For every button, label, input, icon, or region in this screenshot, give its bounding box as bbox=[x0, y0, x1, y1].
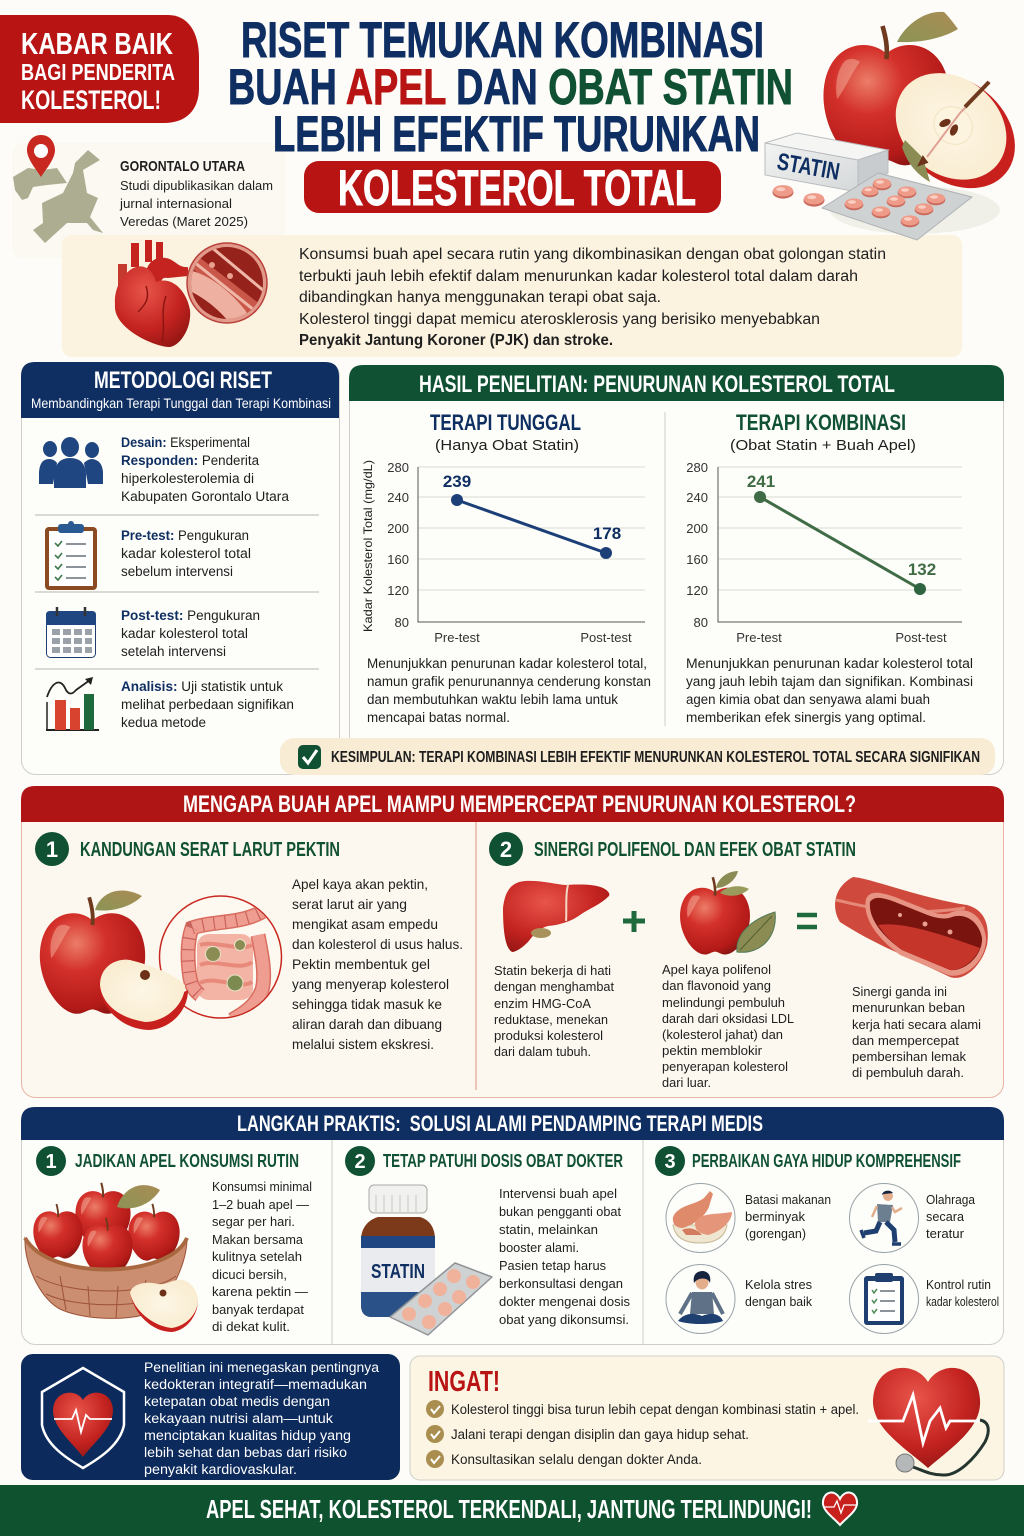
text: desain: Kabupaten Gorontalo Utara bbox=[121, 489, 289, 504]
text: sinergi ganda bbox=[852, 985, 981, 1080]
intro panel: Kolesterol tinggi dapat memicu aterosklerosis yang berisiko menyebabkan bbox=[299, 311, 820, 328]
text: sinergi ganda: di pembuluh darah. bbox=[852, 1066, 964, 1080]
text: step 2: Pasien tetap harus bbox=[499, 1258, 606, 1273]
text: pektin: melalui sistem ekskresi. bbox=[292, 1036, 434, 1052]
text: olahraga: teratur bbox=[926, 1227, 964, 1241]
text: step 1: Konsumsi minimal bbox=[212, 1179, 312, 1194]
text: hasil terapi tunggal: mencapai batas normal. bbox=[367, 710, 510, 725]
heading: metodologi: Membandingkan Terapi Tunggal dan Terapi Kombinasi bbox=[31, 395, 331, 411]
text: batasi makanan bbox=[745, 1193, 831, 1241]
text: step 2: booster alami. bbox=[499, 1240, 579, 1255]
heading: terapi kombinasi: (Obat Statin + Buah Apel) bbox=[730, 437, 916, 454]
text: kelola stres: dengan baik bbox=[745, 1295, 813, 1309]
map pin bbox=[27, 135, 55, 177]
illustration: statin bottle and blister bbox=[361, 1185, 492, 1335]
text: statin: produksi kolesterol bbox=[494, 1029, 603, 1043]
text: pektin: mengikat asam empedu bbox=[292, 916, 438, 932]
text: hasil terapi kombinasi: agen kimia obat dan senyawa alami buah bbox=[686, 692, 930, 707]
icon: batasi makanan bbox=[666, 1184, 735, 1252]
text: post-test: setelah intervensi bbox=[121, 644, 226, 659]
text: hasil terapi kombinasi: yang jauh lebih tajam dan signifikan. Kombinasi bbox=[686, 674, 973, 689]
line chart: terapi tunggal: 200 bbox=[387, 521, 409, 536]
text: kedokteran integratif: kekayaan nutrisi alam—untuk bbox=[144, 1411, 333, 1426]
line chart: terapi tunggal bbox=[361, 460, 645, 645]
location card: Gorontalo Utara: Veredas (Maret 2025) bbox=[120, 214, 248, 229]
text: analisis: melihat perbedaan signifikan bbox=[121, 697, 294, 712]
text: pektin: Pektin membentuk gel bbox=[292, 956, 430, 972]
text: step 1: 1–2 buah apel — bbox=[212, 1197, 309, 1212]
icon: plus bbox=[623, 911, 645, 932]
text: hasil terapi tunggal: Menunjukkan penurunan kadar kolesterol total, bbox=[367, 656, 647, 671]
icon: kontrol rutin bbox=[850, 1264, 918, 1334]
line chart: terapi tunggal: 160 bbox=[387, 552, 409, 567]
text: sinergi ganda: Sinergi ganda ini bbox=[852, 985, 947, 999]
line chart: terapi kombinasi bbox=[686, 460, 962, 645]
line chart: terapi tunggal: 178 bbox=[593, 524, 621, 543]
heading: langkah praktis bbox=[21, 1107, 1004, 1140]
line chart: terapi tunggal: Pre-test bbox=[434, 630, 480, 645]
text: kedokteran integratif: menciptakan kualitas hidup yang bbox=[144, 1428, 351, 1443]
text: step 2: obat yang dikonsumsi. bbox=[499, 1312, 629, 1327]
text: sinergi ganda: pembersihan lemak bbox=[852, 1050, 967, 1064]
subheading: pektin bbox=[35, 832, 340, 866]
line chart: terapi tunggal: 120 bbox=[387, 583, 409, 598]
text: polifenol: melindungi pembuluh bbox=[662, 996, 785, 1010]
panel: langkah praktis bbox=[21, 1107, 1004, 1344]
panel: ingat bbox=[410, 1356, 1004, 1480]
heading: hasil penelitian bbox=[349, 365, 1004, 401]
heading: terapi kombinasi: TERAPI KOMBINASI bbox=[736, 410, 906, 435]
text: sinergi ganda: kerja hati secara alami bbox=[852, 1018, 981, 1032]
text: desain: Desain: Eksperimental bbox=[121, 435, 250, 450]
line chart: terapi kombinasi: 240 bbox=[686, 490, 708, 505]
text: batasi makanan: berminyak bbox=[745, 1210, 806, 1224]
text: kedokteran integratif: Penelitian ini menegaskan pentingnya bbox=[144, 1360, 379, 1375]
line chart: terapi kombinasi: 80 bbox=[694, 615, 708, 630]
panel: mengapa buah apel bbox=[21, 786, 1004, 1098]
line chart: terapi kombinasi: Post-test bbox=[895, 630, 947, 645]
text: hasil terapi tunggal: namun grafik penurunannya cenderung konstan bbox=[367, 674, 651, 689]
title: KOLESTEROL TOTAL bbox=[338, 160, 696, 216]
step 2 heading bbox=[345, 1146, 623, 1176]
text: hasil terapi tunggal bbox=[367, 656, 651, 725]
map of Gorontalo Utara bbox=[13, 150, 103, 243]
badge: kabar baik: BAGI PENDERITA bbox=[21, 59, 175, 85]
text: step 2: statin, melainkan bbox=[499, 1222, 598, 1237]
icon: heart with stethoscope bbox=[868, 1368, 988, 1475]
step 3 heading bbox=[655, 1146, 961, 1176]
text: kedokteran integratif: ketepatan obat medis dengan bbox=[144, 1394, 330, 1409]
text: statin: reduktase, menekan bbox=[494, 1013, 608, 1027]
text: step 1: di dekat kulit. bbox=[212, 1319, 290, 1334]
text: kelola stres: Kelola stres bbox=[745, 1278, 812, 1292]
text: pektin bbox=[292, 876, 463, 1052]
icon: footer heart bbox=[823, 1493, 857, 1525]
step 3 heading: 3 bbox=[664, 1151, 676, 1173]
heading: metodologi bbox=[21, 362, 339, 418]
step 2 heading: TETAP PATUHI DOSIS OBAT DOKTER bbox=[383, 1151, 623, 1171]
heading: terapi tunggal: TERAPI TUNGGAL bbox=[430, 410, 581, 435]
text: step 1: karena pektin — bbox=[212, 1284, 308, 1299]
line chart: terapi kombinasi: 200 bbox=[686, 521, 708, 536]
line chart: terapi kombinasi: Pre-test bbox=[736, 630, 782, 645]
heading: terapi tunggal bbox=[430, 410, 581, 454]
line chart: terapi tunggal: 80 bbox=[395, 615, 409, 630]
text: step 2 bbox=[499, 1186, 630, 1327]
text: kontrol rutin: Kontrol rutin bbox=[926, 1278, 991, 1292]
text: batasi makanan: (gorengan) bbox=[745, 1227, 806, 1241]
panel: kedokteran integratif bbox=[21, 1354, 400, 1480]
line chart: terapi tunggal: 280 bbox=[387, 460, 409, 475]
location card: Gorontalo Utara: jurnal internasional bbox=[119, 196, 232, 211]
panel: metodologi riset bbox=[21, 362, 340, 774]
text: analisis bbox=[121, 679, 294, 730]
text: pektin: Apel kaya akan pektin, bbox=[292, 876, 428, 892]
text: step 1: Makan bersama bbox=[212, 1232, 304, 1247]
text: pektin: yang menyerap kolesterol bbox=[292, 976, 449, 992]
line chart: terapi tunggal: Kadar Kolesterol Total (mg/dL) bbox=[361, 460, 375, 632]
line chart: terapi tunggal: 239 bbox=[443, 472, 471, 491]
badge: kabar baik: KOLESTEROL! bbox=[21, 85, 161, 115]
text: kelola stres bbox=[745, 1278, 813, 1309]
text: kedokteran integratif bbox=[144, 1360, 379, 1477]
text: step 1: segar per hari. bbox=[212, 1214, 295, 1229]
panel: hasil penelitian bbox=[280, 365, 1004, 775]
location card: Gorontalo Utara: Studi dipublikasikan dalam bbox=[120, 178, 273, 193]
text: pre-test: Pre-test: Pengukuran bbox=[121, 528, 249, 543]
text: kedokteran integratif: lebih sehat dan bebas dari risiko bbox=[144, 1445, 347, 1460]
text: post-test: kadar kolesterol total bbox=[121, 626, 248, 641]
text: pektin: serat larut air yang bbox=[292, 896, 407, 912]
text: olahraga bbox=[926, 1193, 975, 1241]
text: kedokteran integratif: penyakit kardiovaskular. bbox=[144, 1462, 297, 1477]
text: polifenol: pektin memblokir bbox=[662, 1044, 762, 1058]
text: analisis: kedua metode bbox=[121, 715, 206, 730]
checklist item 1: Kolesterol tinggi bisa turun lebih cepat dengan kombinasi statin + apel. bbox=[451, 1402, 859, 1417]
text: pektin: sehingga tidak masuk ke bbox=[292, 996, 442, 1012]
icon: apple with leaf bbox=[680, 871, 775, 955]
subheading: pektin: KANDUNGAN SERAT LARUT PEKTIN bbox=[80, 839, 340, 861]
text: polifenol bbox=[662, 963, 794, 1090]
line chart: terapi tunggal: Post-test bbox=[580, 630, 632, 645]
heading: mengapa bbox=[21, 786, 1004, 822]
footer banner bbox=[0, 1485, 1024, 1536]
text: step 1: banyak terdapat bbox=[212, 1302, 304, 1317]
step 1 heading: 1 bbox=[45, 1151, 57, 1173]
text: step 1 bbox=[212, 1179, 312, 1334]
badge: kabar baik bbox=[0, 15, 199, 123]
illustration: apples and statin: STATIN bbox=[775, 148, 842, 186]
title: LEBIH EFEKTIF TURUNKAN bbox=[273, 106, 760, 162]
step 2 heading: 2 bbox=[354, 1151, 366, 1173]
panel: ingat: INGAT! bbox=[428, 1366, 500, 1398]
line chart: terapi kombinasi: 160 bbox=[686, 552, 708, 567]
text: statin: Statin bekerja di hati bbox=[494, 964, 611, 978]
icon: olahraga bbox=[850, 1184, 918, 1252]
icon: shield with heart bbox=[42, 1368, 124, 1468]
text: polifenol: darah dari oksidasi LDL bbox=[662, 1012, 794, 1026]
text: desain bbox=[121, 435, 289, 504]
step 1 heading: JADIKAN APEL KONSUMSI RUTIN bbox=[75, 1151, 299, 1171]
step 1 heading bbox=[36, 1146, 299, 1176]
line chart: terapi tunggal: 240 bbox=[387, 490, 409, 505]
icon: clipboard bbox=[45, 521, 97, 590]
checklist item 3: Konsultasikan selalu dengan dokter Anda. bbox=[451, 1452, 702, 1467]
text: hasil terapi kombinasi: Menunjukkan penurunan kadar kolesterol total bbox=[686, 656, 973, 671]
intro panel bbox=[62, 235, 962, 357]
line chart: terapi kombinasi: 241 bbox=[747, 472, 775, 491]
text: pre-test: kadar kolesterol total bbox=[121, 546, 251, 561]
text: pektin: dan kolesterol di usus halus. bbox=[292, 936, 463, 952]
intro panel: dibandingkan hanya menggunakan terapi obat saja. bbox=[299, 289, 661, 306]
icon: equals bbox=[797, 915, 817, 927]
icon: artery bbox=[835, 877, 988, 978]
text: step 1: dicuci bersih, bbox=[212, 1267, 287, 1282]
text: statin: dengan menghambat bbox=[494, 980, 615, 994]
text: desain: hiperkolesterolemia di bbox=[121, 471, 254, 486]
text: kedokteran integratif: kedokteran integratif—memadukan bbox=[144, 1377, 367, 1392]
heading: terapi kombinasi bbox=[730, 410, 916, 454]
intro panel: Konsumsi buah apel secara rutin yang dikombinasikan dengan obat golongan statin bbox=[299, 246, 886, 263]
text: polifenol: Apel kaya polifenol bbox=[662, 963, 771, 977]
title: BUAH APEL DAN OBAT STATIN bbox=[228, 59, 793, 115]
illustration: apples and statin bbox=[765, 12, 1024, 240]
text: sinergi ganda: dan mempercepat bbox=[852, 1034, 960, 1048]
text: hasil terapi tunggal: dan membutuhkan waktu lebih lama untuk bbox=[367, 692, 618, 707]
illustration: statin bottle and blister: STATIN bbox=[371, 1261, 425, 1283]
text: post-test: Post-test: Pengukuran bbox=[121, 608, 260, 623]
intro panel: terbukti jauh lebih efektif dalam menurunkan kadar kolesterol total dalam darah bbox=[299, 268, 858, 285]
icon: calendar bbox=[46, 607, 96, 658]
text: pre-test: sebelum intervensi bbox=[121, 564, 233, 579]
text: hasil terapi kombinasi bbox=[686, 656, 973, 725]
subheading: sinergi bbox=[489, 832, 856, 866]
icon: kelola stres bbox=[666, 1264, 735, 1334]
icon: people bbox=[39, 437, 103, 488]
subheading: pektin: 1 bbox=[46, 837, 58, 862]
text: polifenol: (kolesterol jahat) dan bbox=[662, 1028, 783, 1042]
line chart: terapi kombinasi: 120 bbox=[686, 583, 708, 598]
heading: metodologi: METODOLOGI RISET bbox=[94, 367, 272, 394]
callout: kesimpulan bbox=[280, 738, 995, 775]
text: statin bbox=[494, 964, 615, 1059]
text: statin: dari dalam tubuh. bbox=[494, 1045, 591, 1059]
text: statin: enzim HMG-CoA bbox=[494, 997, 592, 1011]
icon: liver bbox=[503, 881, 609, 952]
text: hasil terapi kombinasi: memberikan efek sinergis yang optimal. bbox=[686, 710, 926, 725]
title bbox=[228, 12, 793, 216]
badge: kabar baik: KABAR BAIK bbox=[21, 26, 173, 61]
text: polifenol: dari luar. bbox=[662, 1076, 711, 1090]
text: pre-test bbox=[121, 528, 251, 579]
icon: heart with artery bbox=[115, 240, 270, 347]
location card: Gorontalo Utara bbox=[12, 135, 286, 258]
illustration: apple and intestine bbox=[40, 891, 282, 1030]
text: kontrol rutin bbox=[926, 1278, 999, 1309]
text: step 2: berkonsultasi dengan bbox=[499, 1276, 623, 1291]
text: sinergi ganda: menurunkan beban bbox=[852, 1001, 965, 1015]
text: kontrol rutin: kadar kolesterol bbox=[926, 1295, 999, 1309]
text: polifenol: penyerapan kolesterol bbox=[662, 1060, 788, 1074]
text: step 1: kulitnya setelah bbox=[212, 1249, 302, 1264]
subheading: sinergi: 2 bbox=[500, 837, 512, 862]
text: step 2: Intervensi buah apel bbox=[499, 1186, 617, 1201]
location card: Gorontalo Utara: GORONTALO UTARA bbox=[120, 158, 245, 175]
text: polifenol: dan flavonoid yang bbox=[662, 979, 771, 993]
text: post-test bbox=[121, 608, 260, 659]
text: analisis: Analisis: Uji statistik untuk bbox=[121, 679, 283, 694]
text: olahraga: Olahraga bbox=[926, 1193, 975, 1207]
heading: langkah praktis: LANGKAH PRAKTIS: SOLUSI ALAMI PENDAMPING TERAPI MEDIS bbox=[237, 1111, 763, 1136]
line chart: terapi kombinasi: 132 bbox=[908, 560, 936, 579]
intro panel: Penyakit Jantung Koroner (PJK) dan stroke. bbox=[299, 332, 613, 349]
text: pektin: aliran darah dan dibuang bbox=[292, 1016, 442, 1032]
text: batasi makanan: Batasi makanan bbox=[745, 1193, 831, 1207]
checklist item 2: Jalani terapi dengan disiplin dan gaya hidup sehat. bbox=[451, 1427, 749, 1442]
text: desain: Responden: Penderita bbox=[121, 453, 259, 468]
text: olahraga: secara bbox=[926, 1210, 964, 1224]
text: step 2: bukan pengganti obat bbox=[499, 1204, 621, 1219]
icon: analysis chart bbox=[46, 677, 99, 730]
title: RISET TEMUKAN KOMBINASI bbox=[241, 12, 764, 68]
heading: terapi tunggal: (Hanya Obat Statin) bbox=[435, 437, 579, 454]
subheading: sinergi: SINERGI POLIFENOL DAN EFEK OBAT STATIN bbox=[534, 839, 856, 861]
illustration: apple basket bbox=[25, 1183, 198, 1332]
line chart: terapi kombinasi: 280 bbox=[686, 460, 708, 475]
text: step 2: dokter mengenai dosis bbox=[499, 1294, 630, 1309]
